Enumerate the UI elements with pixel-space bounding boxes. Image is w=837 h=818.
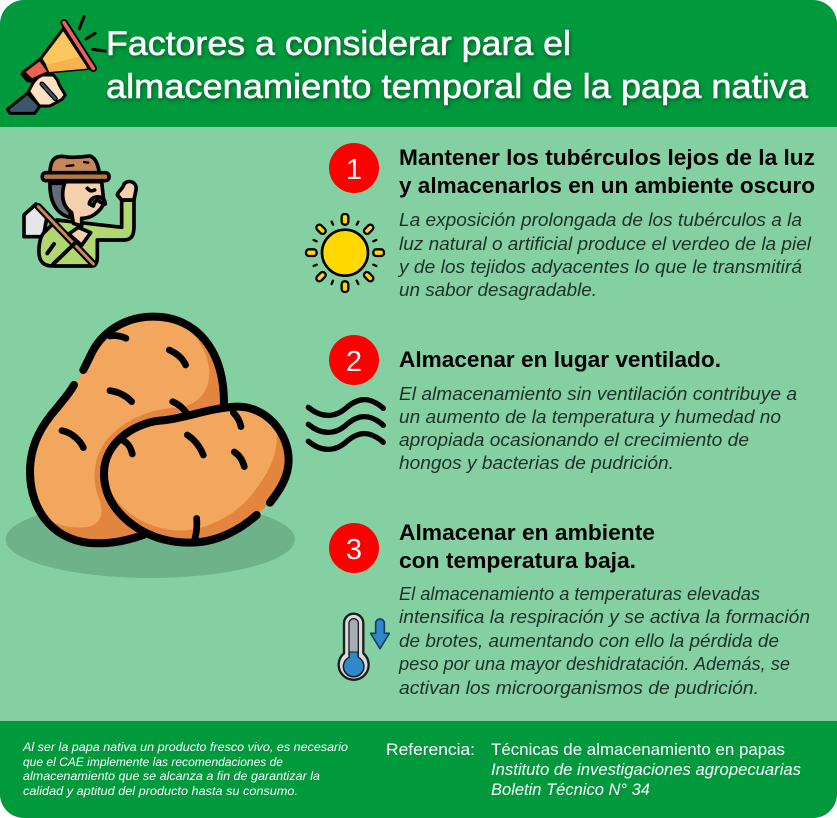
number badge 1: 1 — [346, 154, 362, 186]
icon: megaphone — [7, 17, 105, 113]
heading 2: Almacenar en lugar ventilado. — [399, 347, 721, 372]
body text 1: y de los tejidos adyacentes lo que le transmitirá — [397, 256, 802, 277]
icon: sun — [306, 214, 384, 292]
icon: potatoes — [6, 317, 295, 578]
reference — [387, 743, 801, 795]
number badge 2: 2 — [346, 346, 362, 378]
heading 3: con temperatura baja. — [399, 548, 636, 573]
header band — [0, 0, 837, 127]
section 1 — [306, 143, 815, 300]
body text 1: La exposición prolongada de los tubérculos a la — [399, 209, 802, 230]
section 2 — [308, 335, 797, 473]
number badge 1 — [329, 143, 379, 193]
body text 1 — [397, 209, 812, 300]
heading 1: y almacenarlos en un ambiente oscuro — [399, 173, 815, 198]
title: almacenamiento temporal de la papa nativa — [106, 68, 809, 106]
footer note: que el CAE implemente las recomendaciones de — [23, 755, 283, 769]
heading 3: Almacenar en ambiente — [399, 520, 655, 545]
body text 3: activan los microorganismos de pudrición. — [399, 677, 759, 698]
footer note: Al ser la papa nativa un producto fresco vivo, es necesario — [22, 740, 348, 754]
body text 3: de brotes, aumentando con ello la pérdida de — [399, 630, 779, 651]
footer note: calidad y aptitud del producto hasta su consumo. — [23, 784, 298, 798]
footer note — [22, 740, 348, 798]
body text 3: El almacenamiento a temperaturas elevadas — [399, 583, 760, 604]
reference: Técnicas de almacenamiento en papas — [491, 741, 785, 759]
body text 2: apropiada ocasionando el crecimiento de — [399, 429, 749, 450]
icon: thermometer — [339, 614, 389, 680]
title — [106, 25, 809, 106]
number badge 3 — [329, 523, 379, 573]
number badge 3: 3 — [346, 534, 362, 566]
reference: Instituto de investigaciones agropecuarias — [491, 761, 801, 779]
body text 3: intensifica la respiración y se activa la formación — [399, 606, 810, 627]
body text 2: hongos y bacterias de pudrición. — [399, 452, 674, 473]
icon: air waves — [308, 400, 383, 449]
footer note: almacenamiento que se alcanza a fin de garantizar la — [23, 769, 320, 783]
body text 2: un aumento de la temperatura y humedad no — [399, 406, 781, 427]
heading 3 — [399, 520, 655, 573]
footer band — [0, 721, 837, 818]
section 3 — [329, 520, 810, 698]
reference: Boletin Técnico N° 34 — [491, 781, 650, 799]
heading 1 — [399, 145, 815, 198]
reference: Referencia: — [386, 741, 475, 759]
body text 3 — [398, 583, 810, 698]
body text 1: luz natural o artificial produce el verdeo de la piel — [399, 233, 812, 254]
body text 2: El almacenamiento sin ventilación contribuye a — [399, 383, 797, 404]
heading 1: Mantener los tubérculos lejos de la luz — [399, 145, 815, 170]
title: Factores a considerar para el — [106, 25, 571, 63]
icon: farmer — [24, 156, 136, 266]
number badge 2 — [329, 335, 379, 385]
body text 1: un sabor desagradable. — [399, 279, 597, 300]
body text 2 — [399, 383, 797, 473]
body text 3: peso por una mayor deshidratación. Además, se — [398, 653, 790, 674]
